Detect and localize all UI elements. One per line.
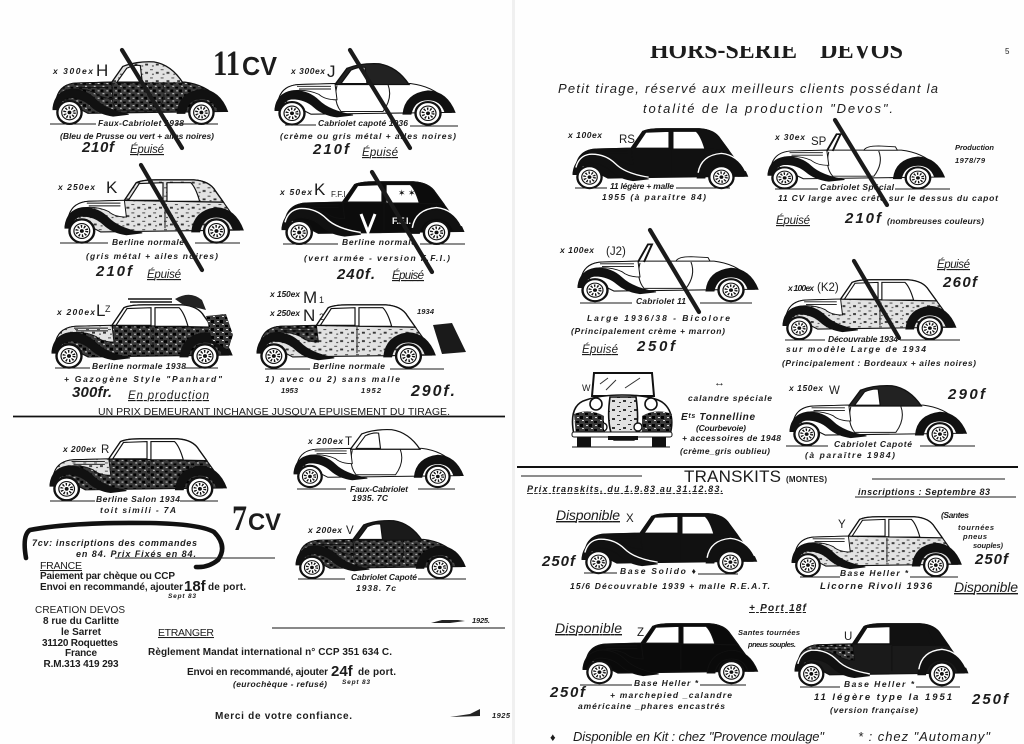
- panel: model R: R: [101, 444, 109, 456]
- heading: 7cv: [232, 498, 281, 538]
- panel: model H: 210f: [81, 139, 116, 156]
- panel: transkit Z: Z: [637, 627, 644, 639]
- panel: transkit U: 250f: [971, 691, 1010, 708]
- panel: model W front view: W: [582, 383, 591, 393]
- panel: model W cabriolet: 290f: [947, 386, 987, 403]
- panel: model K F.F.I.: Berline normale: [342, 237, 416, 247]
- panel: transkit X: X: [626, 513, 634, 525]
- panel: models M and N: N: [303, 306, 315, 325]
- panel: model K: [57, 165, 243, 281]
- panel: model V: x 200ex: [307, 525, 343, 535]
- panel: models M and N: x 150ex: [269, 289, 301, 299]
- panel: model SP: 1978/79: [955, 156, 986, 165]
- intro text: [558, 81, 938, 116]
- panel: model SP: Épuisé: [776, 214, 810, 227]
- panel: model K: Berline normale: [112, 237, 184, 247]
- panel: model W cabriolet: x 150ex: [788, 383, 824, 393]
- panel: model J2: Large 1936/38 - Bicolore: [587, 313, 730, 323]
- panel: models M and N: 290f.: [410, 383, 455, 400]
- line and signature top: [272, 616, 505, 628]
- text block: Etranger: de port.: [358, 667, 396, 678]
- panel: transkit Z: pneus souples.: [747, 640, 796, 649]
- panel: transkit Y: tournées: [958, 523, 994, 532]
- panel: models M and N: 1934: [417, 307, 435, 316]
- panel: models M and N: 1: [319, 295, 324, 305]
- car K: [65, 180, 243, 243]
- text block: France: 18f: [184, 578, 207, 595]
- footnote: availability: Disponible en Kit : chez "Provence moulage": [573, 729, 825, 744]
- panel: transkit Y: Base Heller *: [840, 568, 909, 578]
- panel: model K F.F.I.: 240f.: [336, 266, 375, 283]
- text block: Etranger: ETRANGER: [158, 627, 214, 639]
- panel: transkit Z: Disponible: [555, 620, 622, 636]
- panel: model K2: (Principalement : Bordeaux + ailes noires): [782, 358, 976, 368]
- panel: model SP: (nombreuses couleurs): [887, 216, 984, 226]
- panel: models M and N: 1) avec ou 2) sans malle: [265, 374, 400, 384]
- panel: model K2: 260f: [942, 274, 979, 291]
- panel: model H: H: [96, 61, 108, 80]
- panel: model L: L: [96, 301, 105, 320]
- car U: [795, 624, 968, 685]
- car L with gazogène: [52, 305, 232, 368]
- panel: model RS: x 100ex: [567, 130, 603, 140]
- footnote: availability: * : chez "Automany": [858, 729, 991, 744]
- panel: model L: 300fr.: [72, 384, 112, 401]
- heading: 7cv: CV: [248, 509, 281, 536]
- footnote: availability: [550, 729, 991, 744]
- panel: model K F.F.I.: K: [314, 180, 326, 199]
- panel: model SP: x 30ex: [774, 132, 806, 142]
- panel: transkit Y: Disponible: [954, 579, 1018, 595]
- panel: model R: Berline Salon 1934: [96, 494, 180, 504]
- panel: model L: [52, 295, 233, 402]
- panel: model J: J: [327, 62, 336, 81]
- panel: model K2: [782, 258, 979, 368]
- panel: model J: x 300ex: [290, 66, 326, 76]
- callout: 7cv inscriptions: 7cv: inscriptions des commandes: [32, 538, 197, 548]
- note: port: + Port 18f: [749, 603, 808, 614]
- panel: model K F.F.I.: F.F.I.: [331, 190, 348, 199]
- line and signature top: 1925.: [472, 616, 490, 625]
- panel: model K2: sur modèle Large de 1934: [786, 344, 926, 354]
- car J2: [578, 244, 758, 301]
- text block: Etranger: Envoi en recommandé, ajouter: [187, 667, 328, 678]
- text block: address: CREATION DEVOS: [35, 605, 125, 616]
- car Z: [583, 624, 758, 683]
- panel: model J2: 250f: [636, 338, 677, 355]
- car W': [790, 386, 966, 445]
- text block: France: [40, 560, 246, 600]
- panel: model RS: 11 légère + malle: [610, 181, 674, 191]
- text block: France: de port.: [208, 582, 246, 593]
- text block: address: le Sarret: [61, 627, 102, 638]
- panel: model W front view: calandre spéciale: [688, 393, 772, 403]
- heading: 11cv: 11: [213, 43, 240, 83]
- panel: model W cabriolet: Cabriolet Capoté: [834, 439, 912, 449]
- panel: model J2: Épuisé: [582, 343, 618, 356]
- panel: model K2: Épuisé: [937, 258, 970, 271]
- text: transkits dates: [527, 484, 1016, 497]
- panel: model L: Z: [105, 304, 111, 314]
- panel: model T: T: [345, 436, 352, 448]
- panel: model T: Faux-Cabriolet: [350, 484, 409, 494]
- car J: [275, 64, 455, 125]
- panel: model H: [50, 50, 228, 156]
- panel: transkit Z: 250f: [549, 684, 587, 701]
- panel: transkit X: Disponible: [556, 507, 620, 523]
- panel: transkit U: Base Heller *: [844, 679, 915, 689]
- panel: model L: En production: [128, 390, 209, 402]
- text block: Etranger: [148, 627, 396, 689]
- panel: model J2: (Principalement crème + marron): [571, 326, 725, 336]
- panel: model V: V: [346, 525, 354, 537]
- panel: models M and N: 2: [319, 312, 324, 322]
- brush swoosh: [25, 523, 222, 567]
- section rule: [517, 466, 1018, 468]
- car W front: [572, 373, 672, 447]
- car R: [50, 439, 226, 500]
- panel: model H: (Bleu de Prusse ou vert + ailes noires): [60, 131, 214, 141]
- panel: model RS: 1955 (à paraître 84): [602, 192, 706, 202]
- panel: model R: x 200ex: [62, 444, 97, 454]
- panel: model W cabriolet: [786, 383, 987, 460]
- panel: transkit Y: [792, 510, 1018, 595]
- heading: hors-série Devos: [650, 46, 902, 58]
- car M N: [257, 305, 435, 368]
- panel: model R: [50, 439, 226, 515]
- car V: [296, 521, 465, 578]
- heading: Transkits: (MONTES): [786, 475, 827, 484]
- panel: models M and N: M: [303, 288, 317, 307]
- text block: address: R.M.313 419 293: [44, 659, 119, 670]
- text block: merci: Merci de votre confiance.: [215, 711, 352, 722]
- panel: model K F.F.I.: [279, 172, 465, 283]
- panel: model SP: [768, 120, 999, 227]
- panel: model L: Berline normale 1938: [92, 361, 186, 371]
- panel: transkit Y: Licorne Rivoli 1936: [820, 581, 933, 592]
- panel: model J: (crème ou gris métal + ailes noires): [280, 131, 456, 141]
- panel: model K: 210f: [95, 263, 134, 280]
- text block: France: FRANCE: [40, 560, 82, 572]
- panel: model W cabriolet: W: [829, 385, 840, 397]
- panel: model K2: Découvrable 1934: [828, 334, 898, 344]
- text block: France: Envoi en recommandé, ajouter: [40, 582, 183, 593]
- panel: model V: 1938. 7c: [356, 583, 396, 593]
- panel: model SP: 210f: [844, 210, 883, 227]
- panel: transkit Z: [549, 620, 800, 711]
- panel: model K: x 250ex: [57, 182, 96, 192]
- panel: models M and N: Berline normale: [313, 361, 385, 371]
- panel: model J2: Cabriolet 11: [636, 296, 686, 306]
- text block: Etranger: 24f: [331, 663, 354, 680]
- heading: 7cv: 7: [232, 498, 247, 538]
- car SP: [768, 134, 944, 188]
- panel: model J: Épuisé: [362, 146, 398, 159]
- arrow: width: ↔: [714, 377, 725, 389]
- panel: transkit Z: américaine _phares encastrés: [578, 701, 725, 711]
- panel: model W front view: + accessoires de 1948: [682, 433, 781, 443]
- page number: 5: [1005, 47, 1010, 56]
- panel: model K: K: [106, 178, 118, 197]
- text block: address: 31120 Roquettes: [42, 638, 118, 649]
- text block: Etranger: Sept 83: [342, 679, 370, 686]
- panel: model J2: [559, 230, 758, 356]
- text block: address: France: [65, 648, 97, 659]
- signature bottom: [450, 709, 511, 720]
- panel: model RS: RS: [619, 134, 635, 146]
- panel: transkit Z: Santes tournées: [738, 628, 800, 637]
- panel: transkit Y: (Santes: [941, 510, 969, 520]
- heading: 11cv: CV: [242, 51, 278, 81]
- panel: model H: Épuisé: [130, 143, 164, 156]
- panel: transkit Z: + marchepied _calandre: [610, 690, 732, 700]
- panel: models M and N: x 250ex: [269, 308, 301, 318]
- panel: model J: Cabriolet capoté 1936: [318, 118, 408, 128]
- panel: model H: x 300ex: [52, 66, 94, 76]
- panel: model K: (gris métal + ailes noires): [86, 251, 218, 261]
- panel: model W front view: Tonnelline: [696, 412, 755, 423]
- heading: 11cv: [213, 43, 278, 83]
- panel: models M and N: 1953: [281, 386, 299, 395]
- car T: [294, 430, 463, 487]
- text block: Etranger: Règlement Mandat international n° CCP 351 634 C.: [148, 647, 392, 658]
- panel: transkit Y: Y: [838, 519, 846, 531]
- panel: model H: Faux-Cabriolet 1938: [98, 118, 184, 128]
- signature bottom: 1925: [492, 711, 511, 720]
- panel: model K: Épuisé: [147, 268, 181, 281]
- callout: 7cv inscriptions: [25, 523, 275, 567]
- panel: transkit Z: Base Heller *: [634, 678, 699, 688]
- panel: model K2: (K2): [817, 282, 839, 294]
- panel: model V: [296, 521, 466, 593]
- panel: model V: Cabriolet Capoté: [351, 572, 417, 582]
- heading: Transkits: [521, 467, 1005, 486]
- panel: model K F.F.I.: (vert armée - version F.F.I.): [304, 253, 450, 263]
- panel: model T: [294, 430, 463, 503]
- intro text: Petit tirage, réservé aux meilleurs clients possédant la: [558, 81, 938, 96]
- heading: hors-série Devos: HORS-SERIE: [650, 37, 797, 64]
- centre fold: [512, 0, 515, 744]
- panel: model R: toit simili - 7A: [100, 505, 176, 515]
- panel: model SP: 11 CV large avec crête sur le dessus du capot: [778, 193, 999, 203]
- panel: model RS: [567, 129, 748, 202]
- panel: model K F.F.I.: ✶ ✶: [398, 188, 416, 198]
- panel: model W front view: (crème_gris oublieu): [680, 446, 770, 456]
- footnote: availability: ♦: [550, 732, 556, 744]
- notice: prix inchangé: UN PRIX DEMEURANT INCHANGE JUSQU'A EPUISEMENT DU TIRAGE.: [98, 406, 450, 418]
- heading: Transkits: TRANSKITS: [684, 467, 781, 486]
- panel: transkit X: 250f: [541, 553, 577, 570]
- text block: Etranger: (eurochèque - refusé): [233, 679, 327, 689]
- boot detail: [433, 323, 466, 354]
- car X: [582, 514, 757, 573]
- panel: transkit U: 11 légère type Ia 1951: [814, 692, 952, 703]
- panel: model W front view: [572, 373, 781, 456]
- intro text: totalité de la production "Devos".: [643, 101, 893, 116]
- panel: transkit U: U: [844, 631, 852, 643]
- panel: model L: x 200ex: [56, 307, 96, 317]
- text block: address: [35, 605, 125, 670]
- car H: [53, 62, 228, 124]
- panel: model T: 1935. 7C: [352, 493, 389, 503]
- panel: transkit U: (version française): [830, 705, 918, 715]
- panel: transkit U: [795, 624, 1010, 715]
- panel: model L: + Gazogène Style "Panhard": [64, 374, 223, 384]
- callout: 7cv inscriptions: en 84. Prix Fixés en 84.: [76, 549, 196, 559]
- panel: model K F.F.I.: x 50ex: [279, 187, 313, 197]
- panel: models M and N: 1952: [361, 386, 382, 395]
- heading: hors-série Devos: DEVOS: [820, 37, 903, 64]
- panel: model K F.F.I.: F.F.I.: [392, 216, 411, 226]
- panel: model J2: x 100ex: [559, 245, 595, 255]
- panel: transkit X: [541, 507, 770, 591]
- text: transkits dates: inscriptions : Septembre 83: [858, 487, 990, 497]
- car Y: [792, 517, 961, 576]
- panel: model T: x 200ex: [307, 436, 344, 446]
- panel: model K F.F.I.: Épuisé: [392, 269, 424, 282]
- text block: France: Paiement par chèque ou CCP: [40, 571, 175, 582]
- panel: transkit X: Base Solido ♦: [620, 566, 697, 576]
- panel: model SP: SP: [811, 136, 827, 148]
- panel: models M and N: [257, 288, 466, 400]
- panel: model K2: x 100ex: [787, 283, 815, 293]
- panel: transkit Y: 250f: [974, 551, 1010, 568]
- panel: transkit X: 15/6 Découvrable 1939 + malle R.E.A.T.: [570, 581, 770, 591]
- panel: model SP: Production: [955, 143, 994, 152]
- panel: model J2: (J2): [606, 246, 626, 258]
- car RS: [573, 129, 748, 188]
- panel: model SP: Cabriolet Spécial: [820, 182, 895, 192]
- panel: transkit Y: pneus: [962, 532, 987, 541]
- panel: model W cabriolet: (à paraître 1984): [805, 450, 895, 460]
- panel: model W front view: (Courbevoie): [696, 423, 746, 433]
- panel: model W front view: E: [681, 412, 688, 423]
- text block: France: Sept 83: [168, 593, 196, 600]
- car K2: [783, 280, 956, 339]
- panel: transkit Y: souples): [973, 541, 1004, 550]
- text: transkits dates: Prix transkits, du 1.9.83 au 31.12.83.: [527, 484, 723, 494]
- text block: address: 8 rue du Carlitte: [43, 616, 119, 627]
- panel: model J: 210f: [312, 141, 351, 158]
- panel: model W front view: ts: [688, 413, 695, 420]
- panel: model J: [275, 50, 458, 159]
- car K FFI: [282, 182, 464, 244]
